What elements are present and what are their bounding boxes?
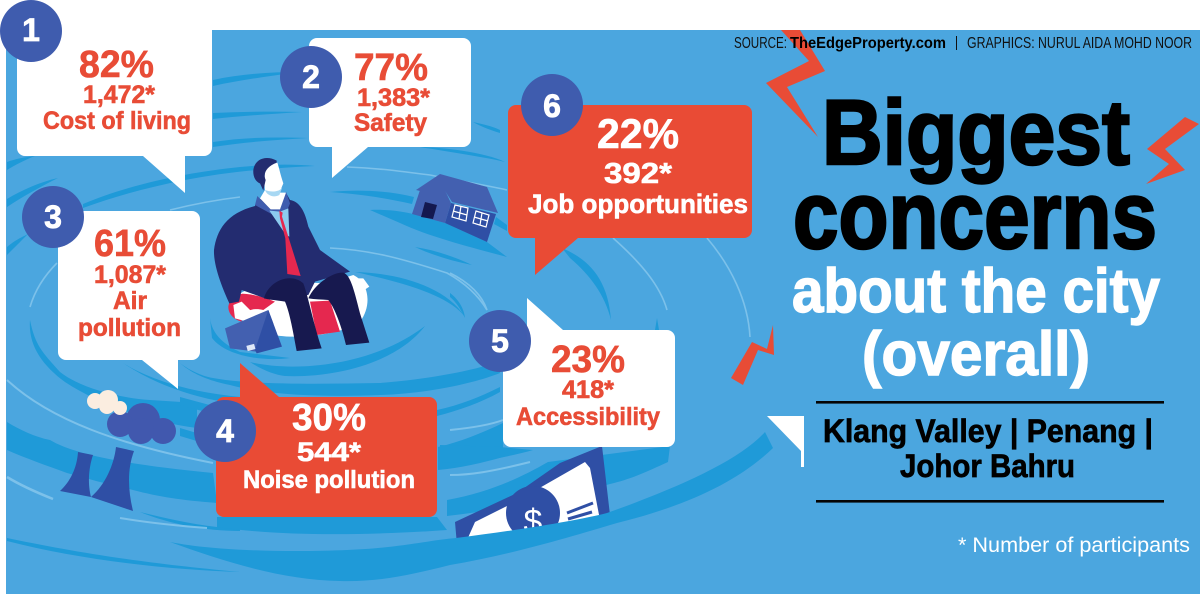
callout 2: safety: 77%	[354, 47, 428, 89]
number badge 3	[22, 186, 84, 248]
title: (overall)	[862, 320, 1090, 389]
callout 4: noise pollution	[216, 363, 437, 517]
number badge 4	[194, 400, 256, 462]
callout 6: job opportunities: 22%	[597, 110, 679, 157]
main swirl crescent	[170, 432, 773, 581]
man on float	[214, 158, 369, 353]
float ring	[228, 275, 368, 337]
number badge 4: 4	[216, 413, 234, 449]
callout 3: air pollution: 61%	[94, 223, 166, 265]
callout 5: accessibility	[503, 298, 675, 447]
callout 1: cost of living: Cost of living	[43, 107, 191, 135]
shirt	[269, 208, 289, 237]
right hand	[352, 278, 369, 291]
lightning bolts	[731, 30, 1199, 385]
icon: banknote: $	[524, 503, 543, 541]
neck and face	[260, 163, 286, 209]
callout 1: cost of living: 1,472*	[83, 81, 155, 109]
number badge 1: 1	[22, 12, 40, 48]
number badge 3: 3	[44, 199, 62, 235]
callout 1: cost of living: 82%	[79, 44, 154, 86]
callout 4: noise pollution: Noise pollution	[243, 466, 415, 494]
source name: TheEdgeProperty.com	[790, 35, 946, 52]
number badge 5	[469, 310, 531, 372]
icon: banknote	[455, 446, 610, 545]
number badge 2	[280, 46, 342, 108]
callout 5: accessibility: 418*	[562, 376, 614, 404]
callout 6: job opportunities	[508, 105, 752, 275]
callout 3: air pollution: Air	[113, 287, 147, 315]
collar	[255, 192, 290, 215]
callout 6: job opportunities: 392*	[604, 158, 673, 190]
callout 5: accessibility: 23%	[551, 339, 625, 381]
left trouser leg	[264, 278, 322, 351]
bolt: lower left of title	[731, 325, 774, 385]
callout 3: air pollution	[58, 211, 200, 389]
callout 3: air pollution: pollution	[78, 314, 181, 342]
callout 4: noise pollution: 30%	[292, 397, 366, 439]
number badge 5: 5	[491, 323, 509, 359]
number badge 6	[521, 74, 583, 136]
right trouser leg	[308, 273, 369, 345]
callout 4: noise pollution: 544*	[297, 437, 362, 467]
source credit: SOURCE:	[734, 35, 787, 52]
hair	[253, 158, 277, 191]
callout 1: cost of living	[17, 0, 212, 193]
title: Biggest	[822, 82, 1130, 184]
subtitle: locations: Klang Valley | Penang |	[823, 413, 1153, 449]
icon: factory	[60, 390, 176, 511]
jacket	[214, 193, 350, 303]
left hand	[233, 302, 252, 321]
callout 2: safety	[309, 38, 471, 178]
number badge 2: 2	[302, 59, 320, 95]
bolt: right of title	[1146, 117, 1199, 184]
subtitle: locations: Johor Bahru	[900, 448, 1075, 484]
subtitle: locations	[816, 401, 1164, 503]
neck shadow	[265, 187, 282, 196]
tie	[279, 211, 301, 276]
icon: sunken house	[412, 174, 498, 242]
title	[792, 82, 1160, 389]
briefcase	[225, 310, 282, 353]
callout 3: air pollution: 1,087*	[94, 261, 166, 289]
bolt: upper left of title	[766, 30, 825, 137]
number badge 1	[0, 0, 62, 62]
title: about the city	[792, 257, 1160, 326]
callout 5: accessibility: Accessibility	[516, 403, 660, 431]
footnote: * Number of participants	[958, 534, 1190, 557]
white flag marker	[767, 416, 804, 467]
number badge 6: 6	[543, 88, 561, 124]
callout 2: safety: Safety	[354, 109, 427, 137]
credit divider	[956, 36, 957, 50]
callout 6: job opportunities: Job opportunities	[528, 189, 748, 219]
callout 2: safety: 1,383*	[357, 84, 430, 112]
water swirl	[7, 72, 750, 572]
